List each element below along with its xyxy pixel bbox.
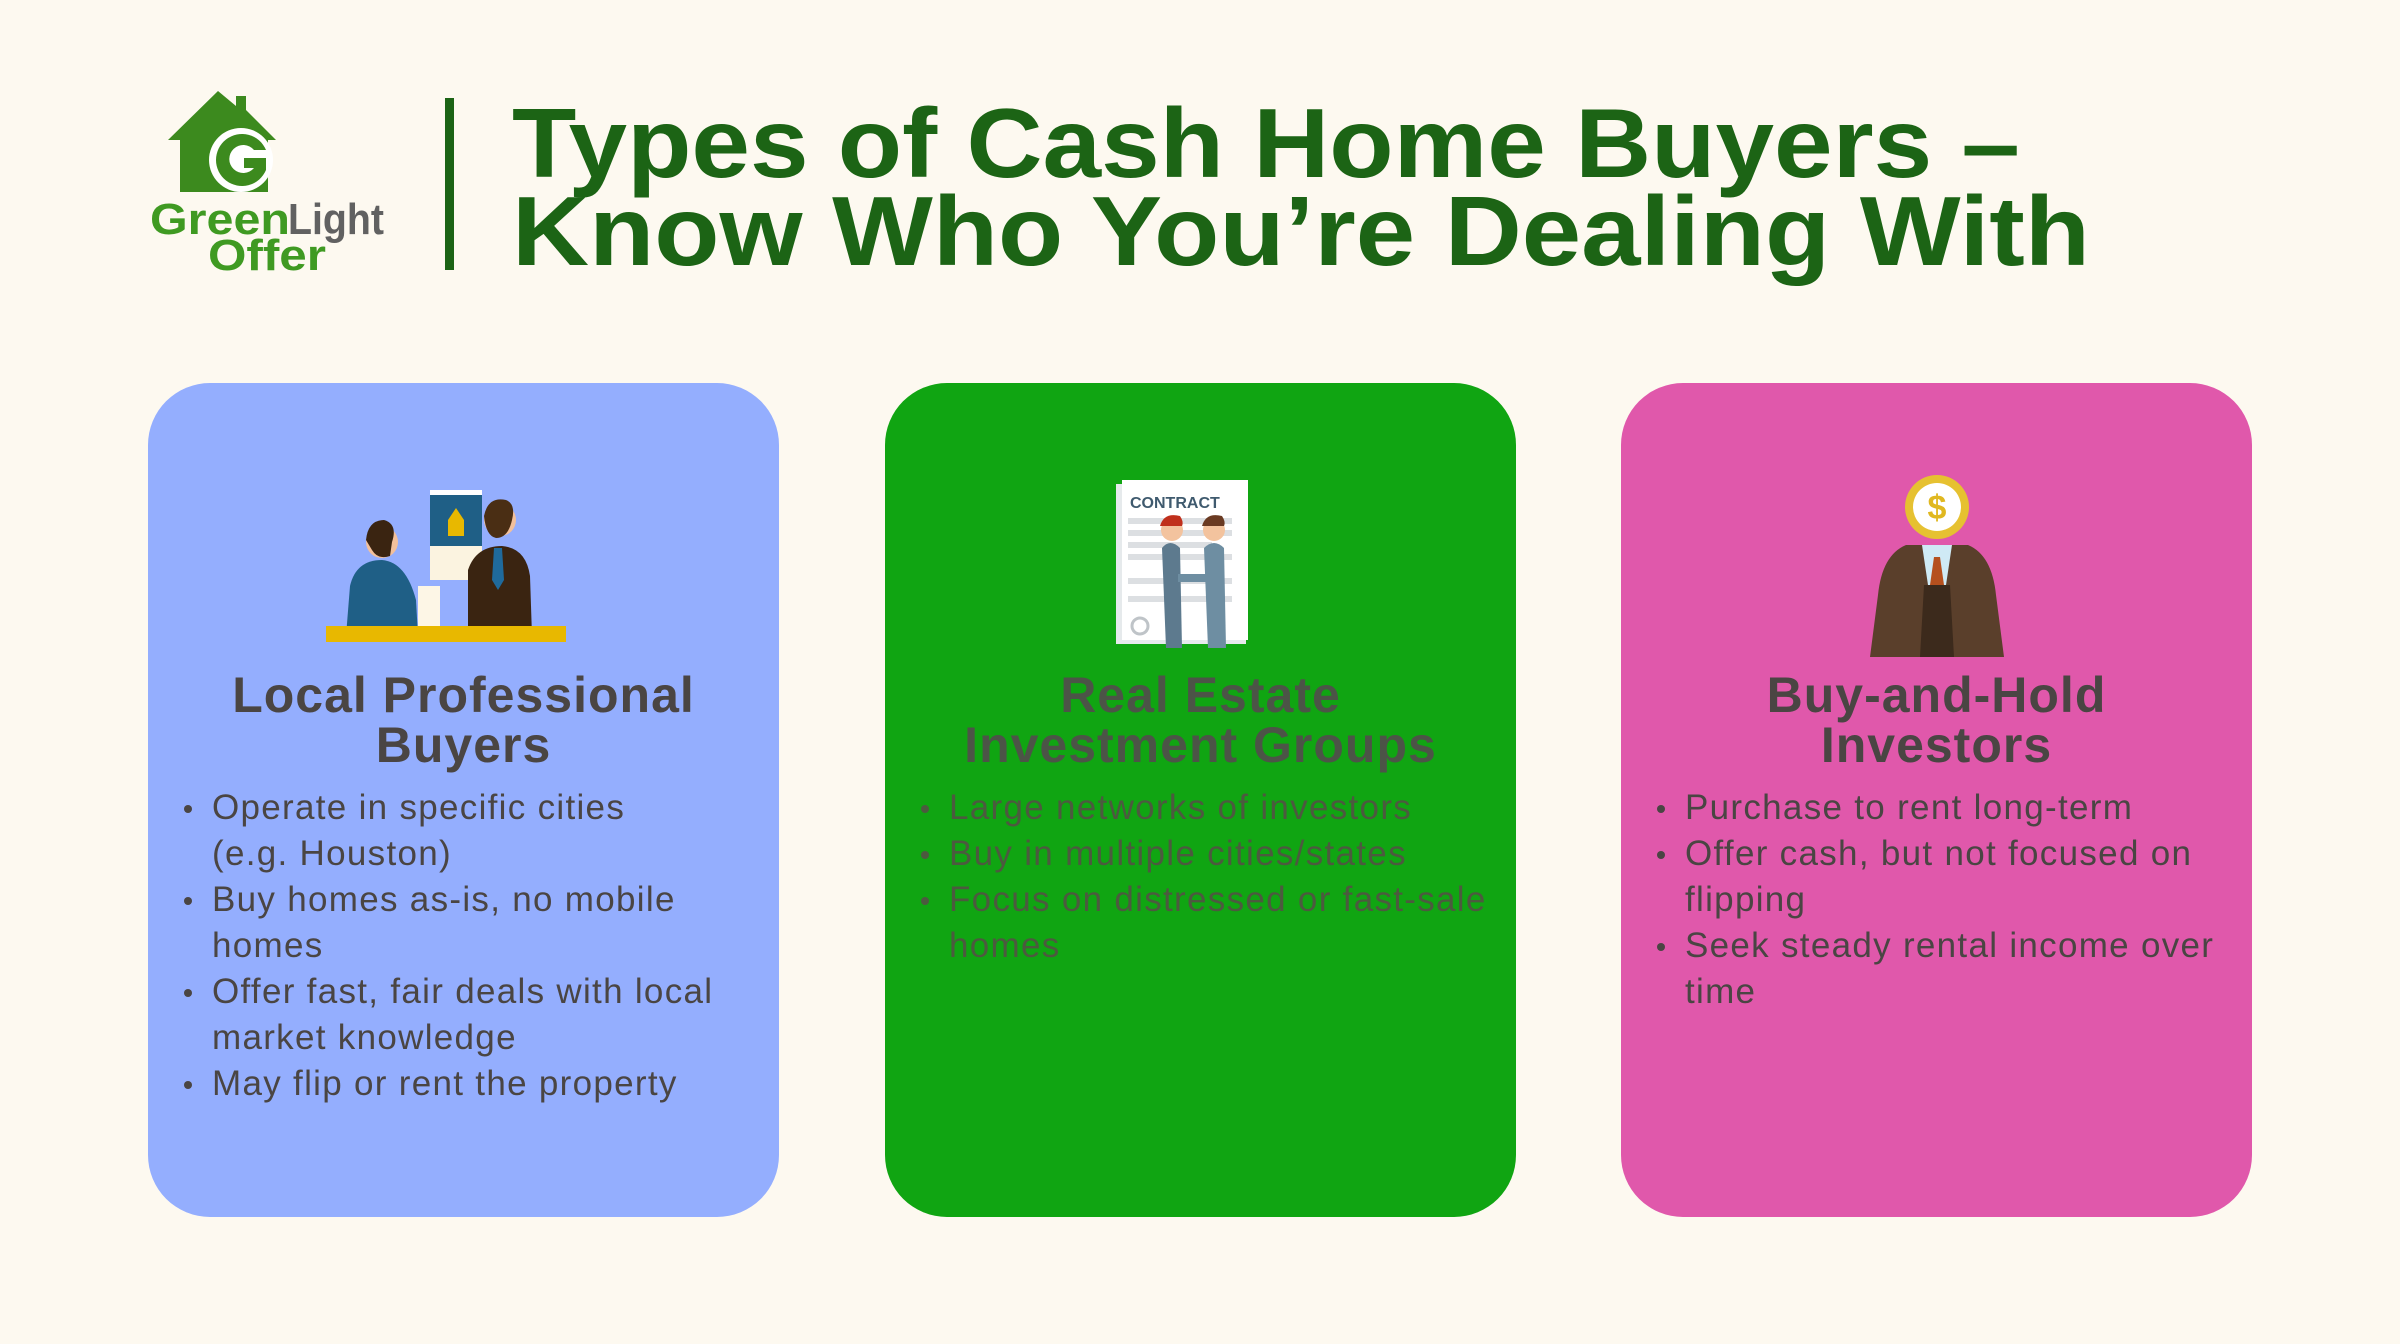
bullet list: Buy in multiple cities/states [949,834,1407,873]
heading: Local Professional [232,667,695,723]
bullet list [1657,788,2214,1011]
bullet list: flipping [1685,880,1806,919]
panel: local professional buyers [148,383,779,1217]
bullet list [184,788,713,1103]
heading: Buy-and-Hold [1767,667,2106,723]
bullet list: homes [949,926,1061,965]
bullet list: Seek steady rental income over [1685,926,2214,965]
logo: Green [150,195,290,244]
panel: buy-and-hold investors [1621,383,2252,1217]
bullet list: Focus on distressed or fast-sale [949,880,1487,919]
title: Know Who You’re Dealing With [512,176,2090,286]
heading [1767,667,2106,773]
title [512,88,2090,286]
bullet list: May flip or rent the property [212,1064,678,1103]
bullet list: Offer fast, fair deals with local [212,972,713,1011]
icon: house [168,91,276,192]
heading: Buyers [376,717,551,773]
heading [232,667,695,773]
icon: agents meeting [326,490,566,642]
bullet list: (e.g. Houston) [212,834,452,873]
bullet list: Purchase to rent long-term [1685,788,2133,827]
bullet list: time [1685,972,1756,1011]
icon: coin-head investor [1870,475,2004,657]
bullet list: homes [212,926,324,965]
panel: real estate investment groups [885,383,1516,1217]
title: Types of Cash Home Buyers – [512,88,2020,198]
bullet list: Operate in specific cities [212,788,625,827]
heading: Real Estate [1060,667,1341,723]
bullet list: Large networks of investors [949,788,1412,827]
bullet list: Buy homes as-is, no mobile [212,880,676,919]
bullet list: market knowledge [212,1018,517,1057]
heading [964,667,1437,773]
icon: contract handshake: CONTRACT [1130,495,1220,512]
icon: contract handshake [1116,480,1248,648]
heading: Investors [1821,717,2052,773]
icon: coin-head investor: $ [1928,489,1947,527]
bullet list: Offer cash, but not focused on [1685,834,2192,873]
logo [150,91,384,278]
bullet list [921,788,1487,965]
heading: Investment Groups [964,717,1437,773]
